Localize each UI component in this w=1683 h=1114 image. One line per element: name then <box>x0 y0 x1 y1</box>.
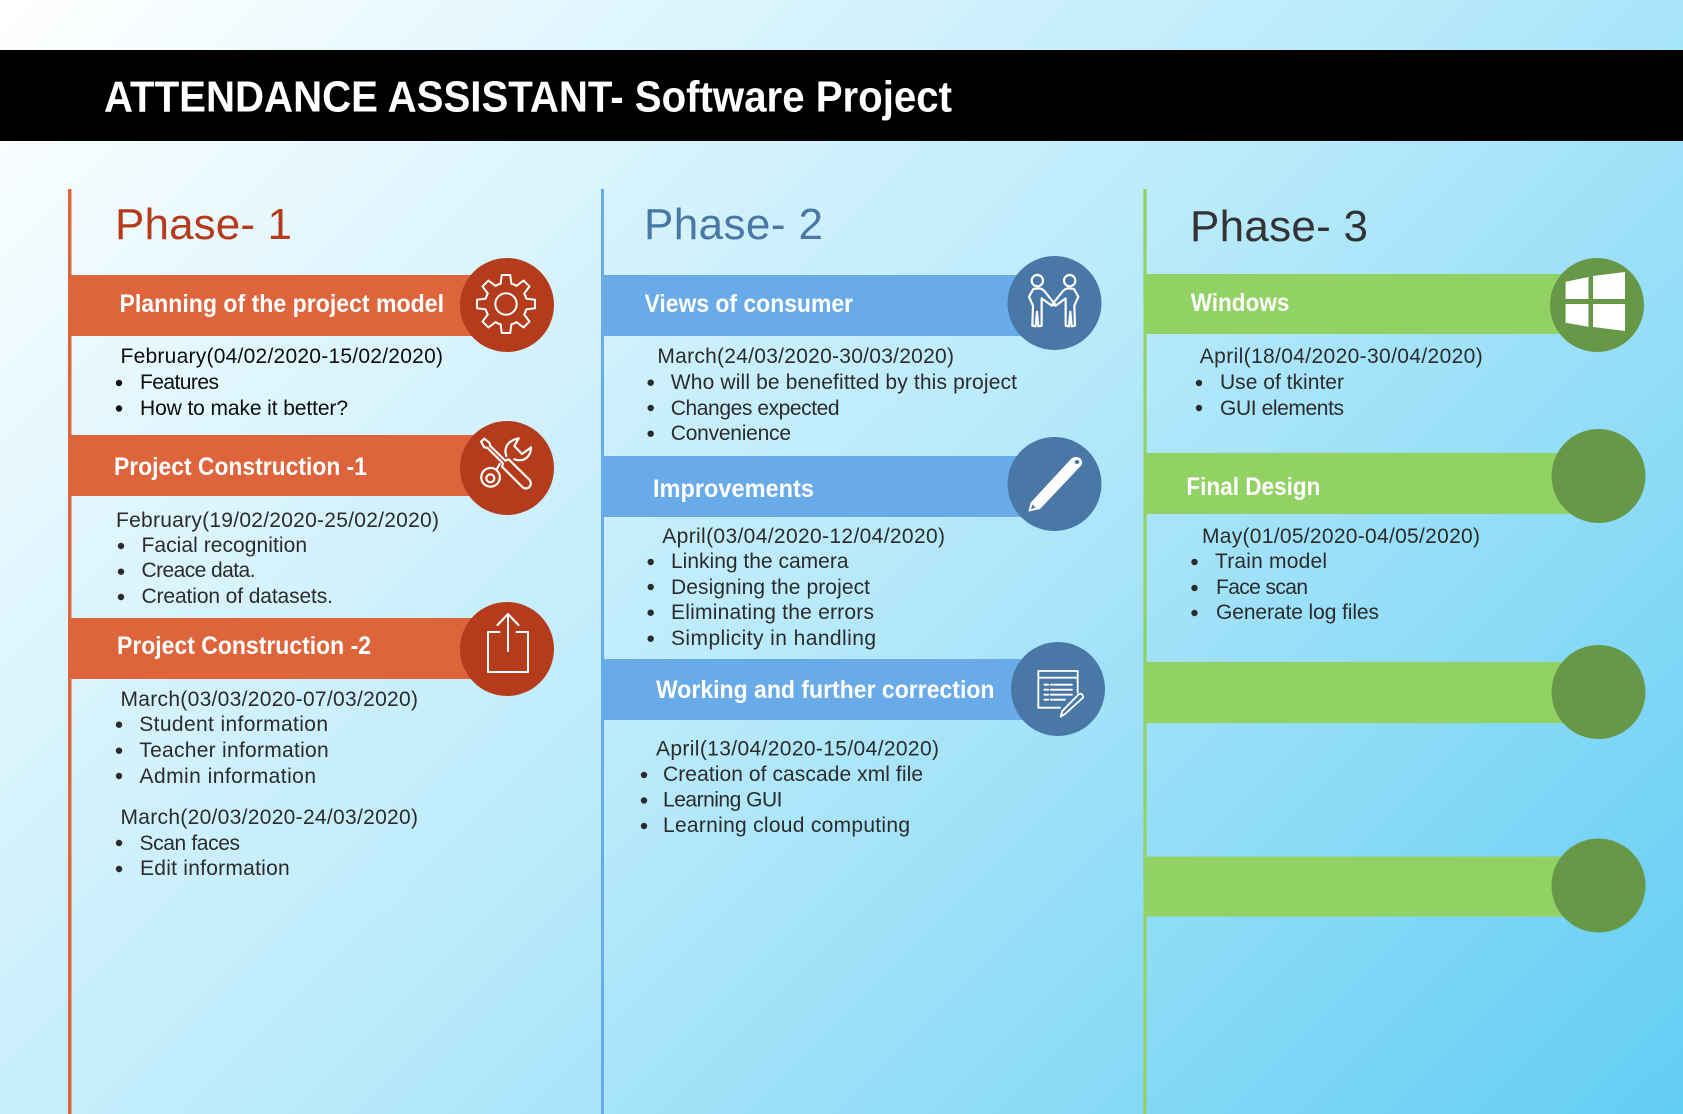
step: windows <box>1147 258 1644 352</box>
text block: working details: Creation of cascade xml file <box>663 763 923 786</box>
step: working and further correction: Working and further correction <box>656 676 994 704</box>
text block: improvements details <box>648 525 945 650</box>
panel: phase 3 <box>1143 189 1646 1114</box>
text block: improvements details: Simplicity in handling <box>671 627 876 650</box>
text block: construction 1 details <box>116 509 439 608</box>
text block: views details: March(24/03/2020-30/03/2020) <box>657 345 954 368</box>
text block: construction 1 details: Facial recognition <box>142 534 307 557</box>
step: planning of the project model <box>72 258 554 352</box>
text block: views details: Convenience <box>671 422 791 445</box>
text block: final design details: Generate log files <box>1216 601 1379 624</box>
icon: windows logo <box>1566 272 1625 331</box>
panel: phase 1 <box>68 189 554 1114</box>
step: views of consumer: Views of consumer <box>644 290 853 318</box>
text block: windows details <box>1196 345 1483 420</box>
step: final design: Final Design <box>1186 473 1320 501</box>
text block: construction 1 details: February(19/02/2020-25/02/2020) <box>116 509 439 532</box>
step: project construction 1: Project Construction -1 <box>114 453 367 481</box>
icon: document with pen <box>1038 671 1083 717</box>
icon: wrench and screwdriver <box>481 438 531 489</box>
text block: working details: April(13/04/2020-15/04/2020) <box>656 738 939 760</box>
title band <box>0 50 1683 141</box>
step: project construction 2: Project Construction -2 <box>117 632 371 660</box>
text block: improvements details: Eliminating the errors <box>671 601 874 624</box>
text block: construction 1 details: Creace data. <box>142 559 256 582</box>
text block: construction 2 details: Teacher information <box>139 739 329 762</box>
icon: share <box>488 614 528 672</box>
text block: improvements details: April(03/04/2020-12/04/2020) <box>662 525 945 548</box>
phase 3 heading: Phase- 3 <box>1190 202 1368 251</box>
text block: working details: Learning GUI <box>663 788 782 812</box>
text block: construction 2 details: March(03/03/2020-07/03/2020) <box>120 688 418 711</box>
text block: final design details: Face scan <box>1216 576 1308 599</box>
text block: windows details: GUI elements <box>1220 397 1344 420</box>
text block: improvements details: Designing the project <box>671 576 870 599</box>
text block: working details <box>641 738 939 837</box>
empty step bar 4 <box>1147 838 1646 932</box>
step: planning of the project model: Planning of the project model <box>120 290 444 318</box>
text block: planning details: Features <box>140 371 219 394</box>
step: project construction 2 <box>72 602 554 696</box>
text block: working details: Learning cloud computing <box>663 814 910 837</box>
text block: final design details: Train model <box>1215 550 1327 573</box>
phase 2 heading: Phase- 2 <box>644 200 823 249</box>
text block: views details: Changes expected <box>671 397 840 420</box>
text block: improvements details: Linking the camera <box>671 550 849 573</box>
icon: pencil <box>1028 457 1082 512</box>
text block: construction 2 details: Edit information <box>140 857 290 880</box>
step: working and further correction <box>604 642 1105 736</box>
text block: construction 2 details <box>116 688 418 880</box>
step: improvements: Improvements <box>653 475 814 503</box>
step: final design <box>1147 429 1646 523</box>
text block: construction 2 details: Admin information <box>140 765 316 788</box>
text block: construction 1 details: Creation of datasets. <box>142 585 333 608</box>
text block: views details <box>648 345 1017 445</box>
step: improvements <box>604 437 1102 531</box>
text block: planning details <box>116 345 443 420</box>
text block: construction 2 details: Scan faces <box>140 832 240 855</box>
icon: gear <box>477 275 535 333</box>
text block: windows details: Use of tkinter <box>1220 371 1344 394</box>
text block: construction 2 details: Student information <box>139 713 328 736</box>
text block: windows details: April(18/04/2020-30/04/2020) <box>1200 345 1483 368</box>
icon: two people shaking hands <box>1029 275 1078 326</box>
text block: views details: Who will be benefitted by this project <box>671 371 1017 394</box>
step: project construction 1 <box>72 421 554 515</box>
step: views of consumer <box>604 256 1102 350</box>
phase 1 heading: Phase- 1 <box>115 200 292 249</box>
text block: final design details <box>1191 525 1480 624</box>
text block: planning details: How to make it better? <box>140 397 348 420</box>
text block: final design details: May(01/05/2020-04/05/2020) <box>1202 525 1480 548</box>
empty step bar 3 <box>1147 645 1646 739</box>
title: ATTENDANCE ASSISTANT- Software Project <box>104 73 952 122</box>
step: windows: Windows <box>1191 289 1289 317</box>
text block: planning details: February(04/02/2020-15/02/2020) <box>120 345 443 368</box>
text block: construction 2 details: March(20/03/2020-24/03/2020) <box>120 806 418 829</box>
panel: phase 2 <box>601 189 1105 1114</box>
